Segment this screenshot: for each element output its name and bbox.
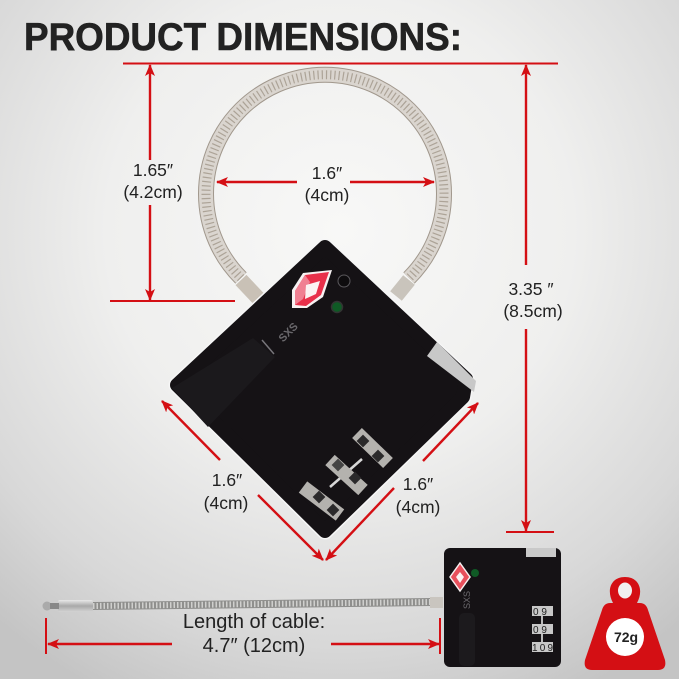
dimension: 1.6 inch left edge: 1.6″ (212, 470, 242, 490)
top reference line (123, 62, 558, 64)
screw (338, 275, 350, 287)
small lock side view (444, 548, 561, 667)
dimension: 1.6 inch loop width (217, 163, 434, 205)
dimension: 1.65 inch height: 1.65″ (133, 160, 173, 180)
dimension: 3.35 inch total height: (8.5cm) (503, 301, 563, 321)
title: PRODUCT DIMENSIONS: (24, 16, 462, 59)
small grip (459, 613, 475, 666)
small TSA logo (450, 563, 470, 591)
cable length dimension (46, 611, 440, 657)
weight icon (585, 577, 665, 670)
small wheels: 1 0 9 (532, 643, 553, 654)
lock case (177, 247, 466, 531)
weight icon: 72g (614, 629, 638, 645)
straight cable (42, 597, 443, 612)
small latch (526, 548, 556, 557)
cable loop (206, 75, 444, 298)
latch tab (427, 342, 476, 392)
TSA logo (292, 270, 332, 308)
green LED (332, 302, 342, 312)
combination wheels (303, 433, 388, 516)
dimension: 1.65 inch height (110, 65, 235, 301)
lock body (172, 247, 476, 531)
dimension: 1.6 inch right edge: (4cm) (396, 497, 440, 517)
dimension: 1.6 inch loop width: 1.6″ (312, 163, 342, 183)
dimension: 1.65 inch height: (4.2cm) (123, 182, 183, 202)
small wheels: 0 9 (533, 625, 547, 636)
dimension: 1.6 inch right edge (326, 403, 478, 560)
small LED (471, 569, 479, 577)
dimension: 1.6 inch right edge: 1.6″ (403, 474, 433, 494)
dimension: 1.6 inch left edge: (4cm) (204, 493, 248, 513)
small brand mark: SXS (462, 591, 472, 609)
dimension: 1.6 inch left edge (162, 401, 323, 560)
dimension: 3.35 inch total height (503, 65, 563, 532)
brand mark: SXS (277, 321, 301, 345)
grip ridge (172, 338, 275, 427)
dimension: 1.6 inch loop width: (4cm) (305, 185, 349, 205)
cable length dimension: Length of cable: (183, 611, 325, 633)
cable length dimension: 4.7″ (12cm) (203, 635, 305, 657)
small wheels: 0 9 (533, 607, 547, 618)
small wheels (532, 606, 553, 654)
dimension: 3.35 inch total height: 3.35 ″ (508, 279, 554, 299)
